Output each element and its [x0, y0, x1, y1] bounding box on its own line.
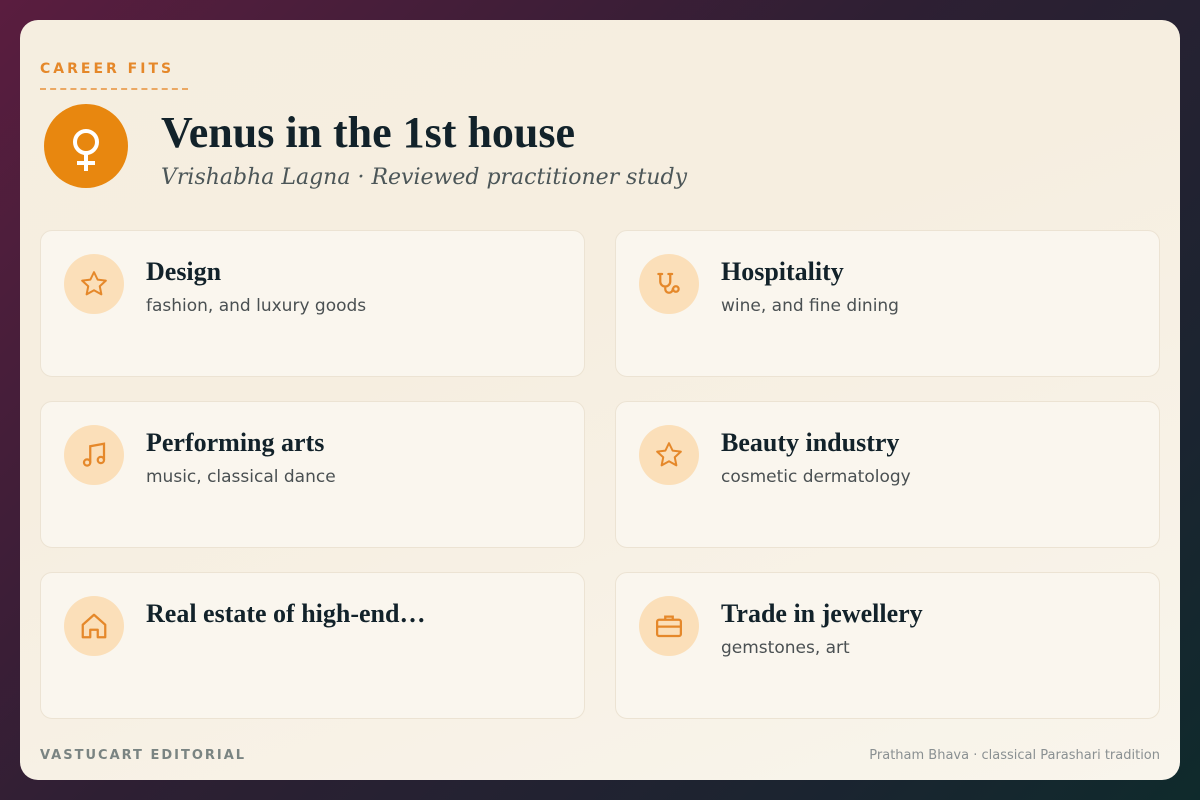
panel: design — [40, 230, 585, 377]
footer left: VASTUCART EDITORIAL — [40, 748, 246, 763]
panel: real estate — [40, 572, 585, 719]
panel: design: Design — [146, 257, 221, 286]
icon: star — [64, 254, 124, 314]
panel: hospitality: Hospitality — [721, 257, 844, 286]
icon: house — [64, 596, 124, 656]
panel: jewellery: Trade in jewellery — [721, 599, 923, 628]
icon: briefcase — [639, 596, 699, 656]
icon: venus — [44, 104, 128, 188]
panel: performing arts: music, classical dance — [146, 467, 336, 487]
panel: beauty: Beauty industry — [721, 428, 899, 457]
panel: hospitality: wine, and fine dining — [721, 296, 899, 316]
panel: hospitality — [615, 230, 1160, 377]
icon: star — [639, 425, 699, 485]
panel: beauty: cosmetic dermatology — [721, 467, 911, 487]
kicker: CAREER FITS — [40, 61, 174, 77]
panel: jewellery — [615, 572, 1160, 719]
panel: performing arts — [40, 401, 585, 548]
title: Venus in the 1st house — [161, 108, 575, 157]
footer right: Pratham Bhava · classical Parashari tradition — [869, 748, 1160, 763]
subtitle: Vrishabha Lagna · Reviewed practitioner study — [161, 165, 687, 190]
panel: real estate: Real estate of high-end… — [146, 599, 425, 628]
icon: music — [64, 425, 124, 485]
panel: performing arts: Performing arts — [146, 428, 324, 457]
panel: jewellery: gemstones, art — [721, 638, 850, 658]
panel: design: fashion, and luxury goods — [146, 296, 366, 316]
panel: beauty — [615, 401, 1160, 548]
icon: stethoscope — [639, 254, 699, 314]
